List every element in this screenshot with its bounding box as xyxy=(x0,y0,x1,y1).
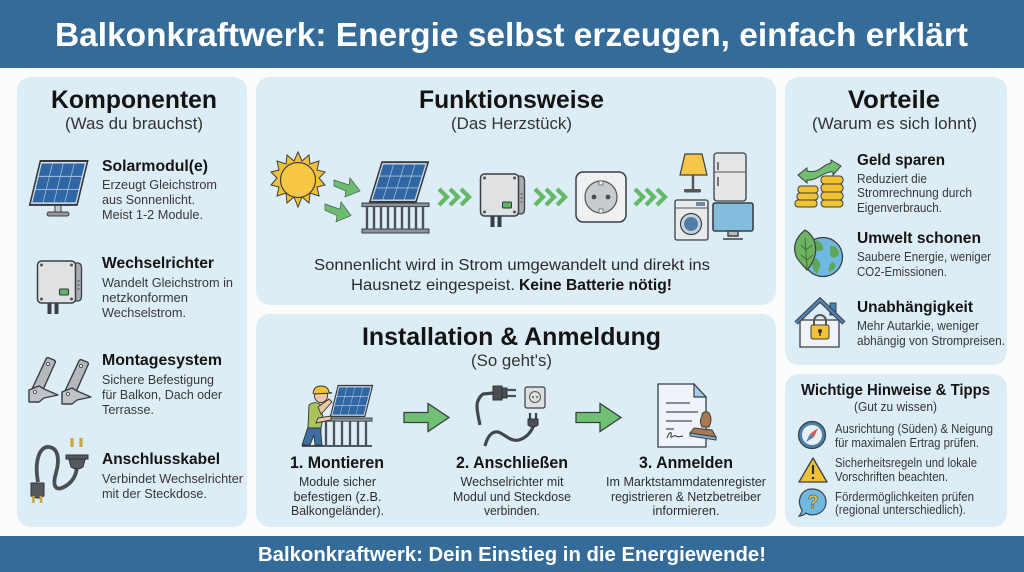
icon: document with stamp xyxy=(658,384,716,447)
icon: inverter xyxy=(480,174,524,227)
text: Anschlusskabel: Anschlusskabel xyxy=(102,451,220,468)
step 3 text: Im Marktstammdatenregister xyxy=(606,475,766,489)
text: Unabhängigkeit: Unabhängigkeit xyxy=(857,299,974,316)
icon: household appliances xyxy=(675,153,753,240)
arrow: sunlight to panel top xyxy=(334,178,360,197)
step 2 text: 2. Anschließen xyxy=(456,453,568,472)
arrow: chevrons 2 xyxy=(535,189,565,205)
text: Geld sparen: Stromrechnung durch xyxy=(857,186,972,200)
panel: Funktionsweise xyxy=(256,77,776,305)
text: Umwelt schonen: CO2-Emissionen. xyxy=(857,265,947,279)
step 2 text: verbinden. xyxy=(484,504,540,518)
text: funding tip xyxy=(835,490,974,517)
footer banner xyxy=(0,536,1024,572)
icon: sun xyxy=(271,152,325,207)
text: Geld sparen: Eigenverbrauch. xyxy=(857,201,942,215)
icon: solar module xyxy=(30,161,88,216)
text: Geld sparen xyxy=(857,152,972,215)
text: orientation tip: Ausrichtung (Süden) & Neigung xyxy=(835,422,993,436)
icon: plug and socket xyxy=(477,386,545,446)
step 2 text xyxy=(453,453,571,518)
icon: connection cable xyxy=(31,438,88,503)
text: Umwelt schonen xyxy=(857,230,991,279)
description: Hausnetz eingespeist. xyxy=(351,277,515,294)
icon: question bubble xyxy=(799,489,826,516)
description: Keine Batterie nötig! xyxy=(519,277,672,294)
text: Wechselrichter: Wechselstrom. xyxy=(102,306,186,320)
step 3 text: 3. Anmelden xyxy=(639,453,733,472)
icon: warning triangle xyxy=(799,458,827,482)
arrow: sunlight to panel bottom xyxy=(325,202,351,222)
step 1 text: 1. Montieren xyxy=(290,453,384,472)
text: Wechselrichter: Wandelt Gleichstrom in xyxy=(102,276,233,290)
description: Sonnenlicht wird in Strom umgewandelt und direkt ins xyxy=(314,257,710,274)
text: funding tip: Fördermöglichkeiten prüfen xyxy=(835,490,974,504)
heading: Funktionsweise: Funktionsweise xyxy=(419,86,604,114)
text: orientation tip xyxy=(835,422,993,450)
text: funding tip: (regional unterschiedlich). xyxy=(835,503,966,517)
icon: worker mounting panel xyxy=(302,386,373,446)
panel: Wichtige Hinweise und Tipps xyxy=(785,374,1007,527)
text: Wechselrichter xyxy=(102,255,233,320)
heading: Wichtige Hinweise & Tipps: Wichtige Hinweise & Tipps xyxy=(801,382,990,399)
step 2 text: Modul und Steckdose xyxy=(453,490,571,504)
subheading: (Das Herzstück) xyxy=(451,115,572,133)
arrow: chevrons 3 xyxy=(635,189,665,205)
subheading: (Warum es sich lohnt) xyxy=(812,115,977,133)
text: Solarmodul: Solarmodul(e) xyxy=(102,158,208,175)
step 3 text: registrieren & Netzbetreiber xyxy=(611,490,761,504)
text: Montagesystem xyxy=(102,352,222,417)
text: orientation tip: für maximalen Ertrag prüfen. xyxy=(835,436,979,450)
panel: Komponenten xyxy=(17,77,247,527)
text: Solarmodul: aus Sonnenlicht. xyxy=(102,193,195,207)
subheading: (So geht's) xyxy=(471,352,552,370)
text: Anschlusskabel: mit der Steckdose. xyxy=(102,487,207,501)
subheading: (Gut zu wissen) xyxy=(854,400,937,414)
icon: compass xyxy=(798,422,826,448)
step 3 text: informieren. xyxy=(652,504,720,518)
text: Solarmodul: Meist 1-2 Module. xyxy=(102,208,203,222)
text: Solarmodul: Erzeugt Gleichstrom xyxy=(102,178,217,192)
text: Solarmodul xyxy=(102,158,217,222)
text: Montagesystem: Sichere Befestigung xyxy=(102,373,214,387)
text: Montagesystem: Terrasse. xyxy=(102,403,154,417)
heading: Komponenten: Komponenten xyxy=(51,86,217,114)
text: safety tip: Sicherheitsregeln und lokale xyxy=(835,456,977,470)
step 3 text xyxy=(606,453,766,518)
heading: Installation & Anmeldung: Installation & Anmeldung xyxy=(362,323,661,351)
heading: Vorteile: Vorteile xyxy=(848,86,940,114)
text: Unabhängigkeit xyxy=(857,299,1005,348)
description xyxy=(314,257,710,294)
icon: globe and leaf xyxy=(795,230,842,276)
text: safety tip: Vorschriften beachten. xyxy=(835,470,948,484)
icon: wall socket xyxy=(576,172,626,222)
subheading: (Was du brauchst) xyxy=(65,115,203,133)
text: Anschlusskabel xyxy=(102,451,243,501)
step 1 text: befestigen (z.B. xyxy=(294,490,382,504)
icon: solar panel on balcony railing xyxy=(362,162,429,233)
text: Wechselrichter: netzkonformen xyxy=(102,291,188,305)
arrow: step 1 to 2 xyxy=(404,404,449,432)
step 2 text: Wechselrichter mit xyxy=(460,475,564,489)
icon: mounting brackets xyxy=(29,358,91,404)
text: Geld sparen: Reduziert die xyxy=(857,172,927,186)
icon: house with lock xyxy=(796,300,844,347)
text: Umwelt schonen: Saubere Energie, weniger xyxy=(857,250,991,264)
icon: inverter xyxy=(38,261,82,314)
footer text: Balkonkraftwerk: Dein Einstieg in die Energiewende! xyxy=(258,544,766,566)
title: Balkonkraftwerk: Energie selbst erzeugen, einfach erklärt xyxy=(55,16,968,53)
text: Unabhängigkeit: abhängig von Strompreisen. xyxy=(857,334,1005,348)
text: Unabhängigkeit: Mehr Autarkie, weniger xyxy=(857,319,979,333)
text: safety tip xyxy=(835,456,977,484)
step 1 text: Balkongeländer). xyxy=(291,504,384,518)
text: Umwelt schonen: Umwelt schonen xyxy=(857,230,981,247)
panel: Vorteile xyxy=(785,77,1007,365)
step 1 text xyxy=(290,453,384,518)
icon: coins and arrows xyxy=(795,160,843,207)
arrow: step 2 to 3 xyxy=(576,404,621,432)
text: Anschlusskabel: Verbindet Wechselrichter xyxy=(102,472,243,486)
header banner xyxy=(0,0,1024,68)
icon: question bubble: ? xyxy=(808,492,818,512)
step 1 text: Module sicher xyxy=(299,475,376,489)
panel: Installation und Anmeldung xyxy=(256,314,776,527)
text: Geld sparen: Geld sparen xyxy=(857,152,945,169)
text: Montagesystem: Montagesystem xyxy=(102,352,222,369)
text: Wechselrichter: Wechselrichter xyxy=(102,255,214,272)
arrow: chevrons 1 xyxy=(439,189,469,205)
text: Montagesystem: für Balkon, Dach oder xyxy=(102,388,222,402)
